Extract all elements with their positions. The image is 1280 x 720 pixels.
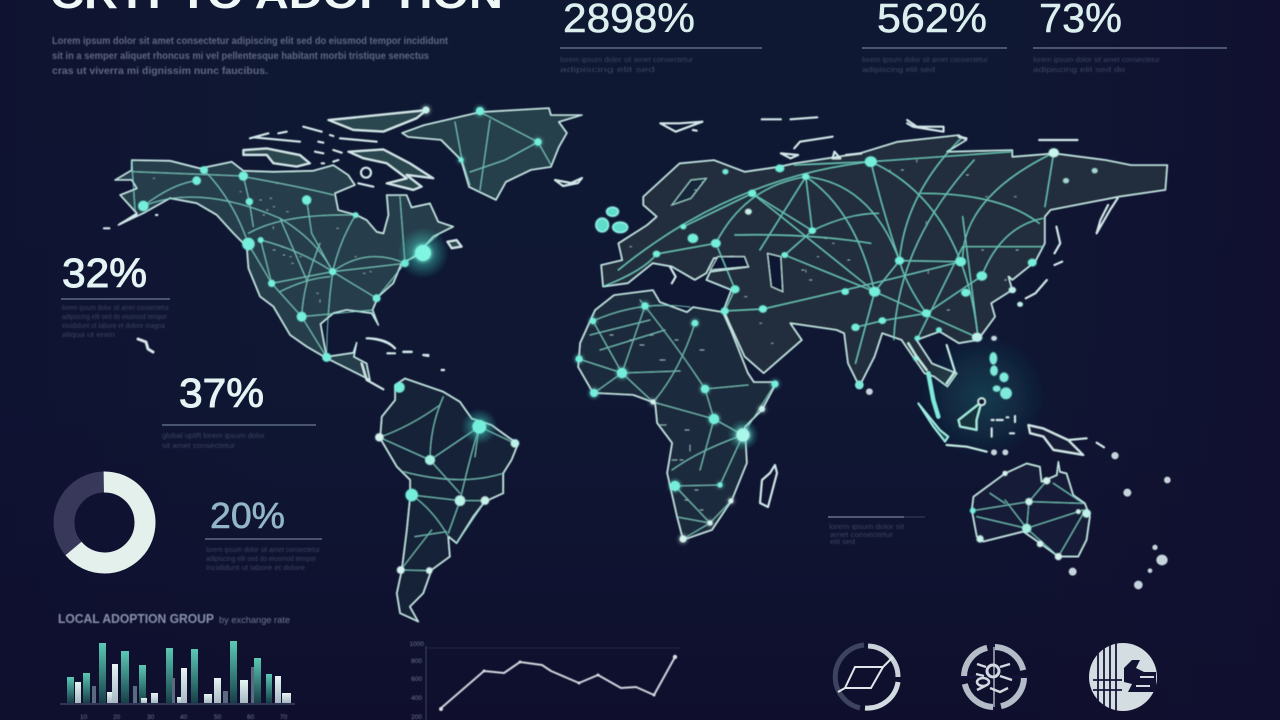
stat: 20%: incididunt ut labore et dolore bbox=[206, 565, 305, 572]
stat: 73%: lorem ipsum dolor sit amet consectetur bbox=[1033, 57, 1161, 64]
stat: 37%: global uplift lorem ipsum dolor bbox=[162, 433, 266, 440]
stat: 562%: adipiscing elit sed bbox=[862, 67, 935, 74]
stat: 32%: incididunt ut labore et dolore magna bbox=[62, 323, 165, 330]
icon: circuit disc bbox=[1089, 643, 1157, 711]
stat: 37%: sit amet consectetur bbox=[162, 443, 236, 450]
callout: caption beside Australia: lorem ipsum dolor sit bbox=[829, 524, 904, 531]
line chart: 1000 bbox=[410, 641, 424, 648]
icon: network crosshair bbox=[960, 643, 1028, 711]
stat: 37%: 37% bbox=[179, 370, 264, 416]
line chart: 800 bbox=[411, 658, 422, 665]
stat: 2898%: adipiscing elit sed bbox=[560, 67, 655, 74]
line chart: 600 bbox=[411, 676, 422, 683]
donut chart bbox=[63, 481, 146, 564]
stat: 32%: lorem ipsum dolor sit amet consectetur bbox=[62, 305, 170, 312]
stat: 32%: aliqua ut enim bbox=[62, 332, 115, 339]
stat: 32% bbox=[61, 250, 170, 339]
line chart bbox=[410, 641, 680, 720]
stat: 32%: adipiscing elit sed do eiusmod tempor bbox=[62, 314, 168, 321]
stat: 32%: 32% bbox=[62, 250, 147, 296]
map: South America and Central America bbox=[362, 338, 519, 622]
map: South-East Asia islands, Australia and Pacific bbox=[855, 333, 1171, 589]
bar chart bbox=[58, 611, 295, 720]
stat: 20% bbox=[205, 495, 322, 572]
map: east coast glow hotspot bbox=[397, 227, 449, 279]
intro text block: sit in a semper aliquet rhoncus mi vel pellentesque habitant morbi tristique senectus bbox=[52, 51, 429, 62]
intro text block bbox=[52, 36, 449, 77]
stat: 37% bbox=[162, 370, 316, 450]
stat: 20%: lorem ipsum dolor sit amet consectetur bbox=[206, 547, 321, 554]
callout: caption beside Australia bbox=[828, 517, 925, 546]
intro text block: Lorem ipsum dolor sit amet consectetur adipiscing elit sed do eiusmod tempor incididunt bbox=[52, 36, 449, 47]
bar chart heading: LOCAL ADOPTION GROUP bbox=[58, 611, 214, 626]
stat: 73% bbox=[1033, 0, 1227, 74]
map: Eurasia bbox=[596, 117, 1167, 394]
icon: parallelogram ring bbox=[835, 645, 898, 708]
stat: 2898%: lorem ipsum dolor sit amet consectetur bbox=[560, 57, 694, 64]
line series bbox=[439, 655, 677, 711]
stat: 562%: lorem ipsum dolor sit amet consectetur bbox=[862, 57, 989, 64]
bar chart heading: by exchange rate bbox=[219, 615, 290, 625]
map: North America bbox=[104, 110, 462, 380]
map: Africa and Madagascar bbox=[576, 290, 778, 542]
stat: 20%: 20% bbox=[210, 495, 285, 536]
intro text block: cras ut viverra mi dignissim nunc faucibus. bbox=[52, 66, 268, 77]
map: small island near 32% bbox=[138, 339, 153, 352]
world network map bbox=[104, 106, 1171, 622]
stat: 2898% bbox=[560, 0, 762, 74]
stat: 20%: adipiscing elit sed do eiusmod tempor bbox=[206, 556, 317, 563]
map: Greenland and Iceland bbox=[402, 106, 582, 200]
stat: 562% bbox=[862, 0, 1007, 74]
callout: caption beside Australia: elit sed bbox=[830, 539, 855, 546]
line chart: 400 bbox=[411, 695, 422, 702]
callout: caption beside Australia: amet consectetur bbox=[830, 532, 894, 539]
stat: 73%: adipiscing elit sed do bbox=[1033, 67, 1125, 74]
